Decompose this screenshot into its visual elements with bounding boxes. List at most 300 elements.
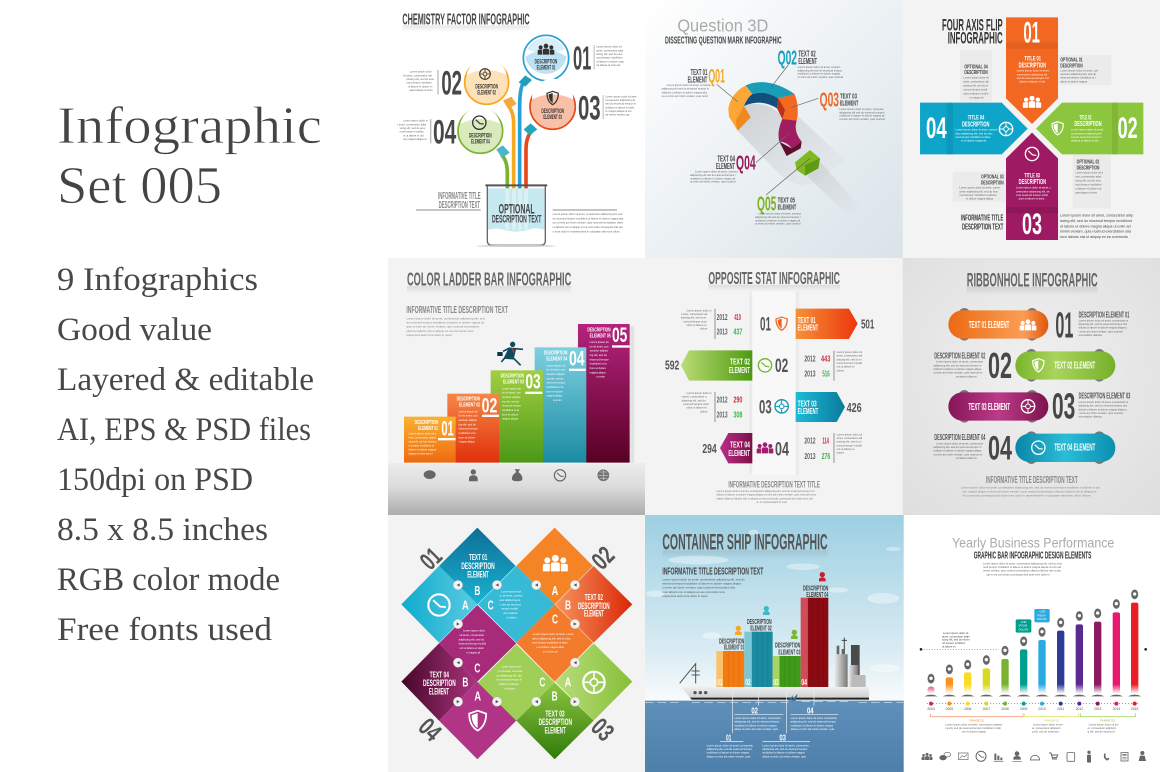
arrow 03: ELEMENT [798, 406, 819, 416]
sea note 02: 02 [751, 705, 758, 715]
note with dotted line: scing elit, sed do eiusm [942, 638, 970, 642]
optional labels: mod tempor incididunt [1075, 182, 1102, 186]
panel: opposite stat [645, 258, 903, 515]
label Q02: incididunt ut labore et dolore magna [798, 72, 840, 76]
bar 05: DESCRIPTION [587, 327, 611, 333]
bar 04: eiusmod tempor [546, 381, 565, 385]
callout teal [1016, 619, 1031, 633]
timeline: 2010 [1038, 707, 1046, 711]
stats upper right: Lorem ipsum dolor sit [837, 350, 862, 354]
side descriptions: re magna aliqua ut eni [605, 109, 632, 113]
green diamonds: TEXT 03 [545, 709, 565, 719]
footer title: itation ullamco laboris nisi ut aliquip ex ea commodo consequat duis aute irure dol [717, 496, 813, 500]
orange diamonds: mod tempor incididunt ut labor [532, 641, 568, 645]
panel: chemistry factor [388, 0, 645, 258]
label Q02: ut enim ad minim veniam, quis nostrud [798, 75, 844, 79]
lower description: Lorem ipsum dolor sit amet, consectetur adip [1060, 214, 1133, 218]
bar 05: 05 [612, 323, 627, 347]
description 01 [1079, 309, 1130, 337]
orange diamonds: TEXT 02 [585, 592, 603, 602]
bar 02: magna aliqua [459, 440, 475, 444]
letters A B C: C [552, 611, 558, 626]
side descriptions: mod tempor incididunt [596, 56, 623, 60]
side descriptions: t amet, consectetur adipi [397, 122, 427, 126]
callout teal: DOLOR [1019, 627, 1028, 631]
beaker [476, 184, 556, 247]
optional labels: ctetur adipiscing elit, sed do eius [959, 189, 998, 193]
bar 02 [447, 393, 499, 463]
side descriptions: Lorem ipsum dolor sit [596, 45, 622, 49]
label Q04 [690, 153, 756, 184]
ribbon 03 [948, 390, 1048, 423]
ribbon 03: TEXT 03 ELEMENT [968, 402, 1010, 413]
container bar 03 [773, 643, 801, 687]
stats lower right: 2013 [804, 452, 816, 461]
bar 05: eiusmod tempor [590, 357, 609, 361]
intro text [406, 305, 508, 337]
optional labels: abore et dolore magna [1060, 79, 1088, 83]
flask 04: DESCRIPTION [469, 133, 492, 139]
intro text: INFORMATIVE TITLE DESCRIPTION TEXT [406, 305, 508, 316]
bar 04: incididunt ut la [546, 385, 564, 389]
feature list: AI, EPS & PSD files [57, 412, 311, 448]
arrow 04: ELEMENT [728, 449, 750, 458]
container bar 01: DESCRIPTION [719, 638, 744, 645]
flask 02: DESCRIPTION [475, 85, 498, 91]
feature list: Layered & editable [57, 362, 314, 398]
container bar 04: 04 [801, 677, 807, 687]
phase 03 [1088, 719, 1119, 733]
lower description: minim veniam, quis nostrud exercitation ulla [1060, 230, 1132, 234]
icon: man [1087, 751, 1091, 763]
informative title: DESCRIPTION TEXT [962, 222, 1003, 231]
phase 01: ng elit, sed do eiusmod tempor incididunt ut lab [945, 726, 1001, 730]
bar 04: ing elit, sed do [546, 376, 564, 380]
phase 03: et, consectetur adipiscin [1088, 726, 1117, 730]
bar 04: sectetur adipisc [546, 372, 565, 376]
stats lower left: 290 [733, 395, 743, 404]
heading: four axis flip [942, 16, 1003, 47]
arrow 02: TEXT 02 [730, 357, 750, 367]
arm 01 orange: TITLE 01 [1024, 56, 1041, 63]
panel: question 3D: Q01 [708, 67, 725, 88]
arrow 01: 501 [861, 317, 875, 332]
bar 04: 04 [569, 346, 585, 370]
label Q04: adipiscing elit sed do eiusmod tempor i [690, 173, 736, 177]
bar 03 [491, 370, 543, 463]
flask 03 [524, 79, 575, 135]
stats upper right: 443 [821, 354, 831, 363]
flask 03: DESCRIPTION [541, 109, 564, 115]
numbers 01-04: 04 [433, 113, 457, 151]
label Q05: ELEMENT [778, 202, 797, 211]
stats upper right: usmod tempor incidid [837, 361, 862, 365]
phase 02 [1032, 719, 1064, 733]
heading: yearly business performance: uip ex ea commodo consequat duis aute irure dolor in [986, 572, 1050, 576]
stats lower left: dipiscing elit, sed do [682, 398, 706, 402]
label Q03: Q03 [820, 89, 839, 111]
icon: globe [598, 470, 609, 481]
letters A B C: B [552, 689, 558, 704]
lower description: co laboris nisi ut aliquip ex ea commodo consequat duis aut [553, 225, 623, 229]
ribbon 02 [1015, 349, 1115, 382]
bar 02: lor sit amet, con [459, 414, 478, 418]
description 04 [933, 432, 986, 460]
sea [645, 701, 904, 772]
panel: four axis flip [903, 0, 1160, 258]
blue diamonds [401, 528, 555, 643]
description 03: dipiscing elit, sed do eiusmod tempor inci [1079, 404, 1128, 408]
container bar 03: DESCRIPTION [775, 643, 800, 650]
stats lower right [804, 432, 862, 463]
bar 01: labore et dolore magna [409, 448, 437, 452]
callout teal: LOR [1021, 620, 1027, 624]
timeline: 2013 [1094, 707, 1102, 711]
description 03: t enim ad minim veniam, quis nostrud [1079, 411, 1123, 415]
phase 03: g elit, sed do eiusmod t [1088, 729, 1115, 733]
label Q01: Lorem ipsum dolor sit amet, consecte [667, 83, 711, 87]
blue diamonds: Lorem ipsum dol [501, 589, 521, 593]
phase 03: PHASE 03 [1100, 719, 1115, 723]
ribbon 01 [948, 308, 1048, 341]
label Q04: Q04 [736, 153, 756, 175]
note with dotted line: ut labore et [942, 644, 956, 648]
icon: clipboard [1067, 753, 1075, 761]
rotated numbers: 02 [586, 541, 620, 575]
footer title: INFORMATIVE DESCRIPTION TEXT TITLE [728, 479, 820, 489]
optional labels: scing elit, sed do eius [1075, 178, 1101, 182]
optional labels: piscing elit, sed do ei [963, 84, 988, 88]
optional labels: amet, consectetur adi [963, 80, 989, 84]
blue diamonds: et dolore [506, 615, 517, 619]
arrow 03 [796, 392, 862, 422]
stats top left: 2012 [717, 313, 728, 322]
side descriptions: Lorem ipsum dolor [410, 70, 432, 74]
optional labels: ut labore et dolore ma [1075, 186, 1102, 190]
stats top left [681, 308, 743, 339]
sea note 04: incididunt ut labore et dolore magna [791, 723, 833, 727]
label Q03 [820, 89, 885, 121]
heading: chemistry factor [402, 12, 530, 32]
white ledge [404, 462, 631, 465]
sea note 04: 04 [807, 705, 814, 715]
value pins [927, 589, 1138, 684]
arm 04 blue: mod tempor incididunt ut labo [955, 135, 991, 139]
optional labels [959, 58, 1103, 201]
flask 01: ELEMENT 01 [537, 66, 556, 72]
icon: clock [554, 470, 566, 481]
numbers 01-04: 02 [988, 345, 1012, 386]
heading: question 3D: DISSECTING QUESTION MARK INFOGRAPHIC [665, 35, 782, 46]
intro text: equat duis aute irure dolor in repre [406, 333, 452, 337]
optional labels: et dolore magna aliqua [966, 197, 994, 201]
description 02: cididunt ut labore et dolore magna aliqua [933, 367, 982, 371]
heading: yearly business performance: Yearly Business Performance [952, 535, 1115, 551]
letters A B C [462, 583, 572, 704]
label Q01: TEXT 01 [691, 68, 708, 77]
label Q05: Q05 [757, 193, 776, 215]
bar 01: 01 [441, 417, 454, 441]
informative title [961, 214, 1004, 231]
sea note 03: Lorem ipsum dolor sit amet, consectetu [762, 743, 809, 747]
intro text: ullamco laboris nisi ut aliquip ex ea commodo cons [406, 329, 474, 333]
icon: phone [1105, 754, 1109, 760]
informative title [416, 191, 481, 211]
arm 03 purple: DESCRIPTION [1019, 177, 1046, 186]
arm 02 green: 02 [1118, 112, 1138, 145]
purple diamonds: DESCRIPTION [423, 678, 456, 688]
center strip [749, 291, 799, 475]
ship hull [679, 664, 869, 701]
connector lines [720, 690, 838, 742]
sea note 01 [707, 733, 754, 758]
icon: person [1012, 751, 1022, 762]
arm 01 orange: sed do eiusmod tempor inci [1017, 76, 1050, 80]
footer title: or in reprehenderit in volu [757, 500, 787, 504]
side bars [430, 45, 604, 143]
stats lower left: eiusmod tempor incid [683, 402, 709, 406]
footer title: ore magna aliqua ut enim ad minim veniam, quis nostrud exercitation ullamco laboris nisi ut aliquip ex [963, 490, 1097, 494]
arm 02 green: Lorem ipsum dolor sit amet, [1071, 128, 1104, 132]
label Q05: adipiscing elit sed do eiusmod tempor i [755, 215, 801, 219]
arm 04 blue: Lorem ipsum dolor sit amet, consec [955, 128, 998, 132]
numbers 01-04 [433, 40, 601, 151]
side descriptions: ut labore et dolore m [408, 84, 433, 88]
bar 03: magna aliqua [502, 417, 518, 421]
arm 02 green: TITLE 02 [1079, 114, 1092, 121]
bar 02: bore et dolore [459, 435, 476, 439]
blue diamonds: ELEMENT [467, 569, 489, 579]
stats lower left: t amet, consectetur a [682, 395, 707, 399]
bar 02: sectetur adipisc [459, 418, 478, 422]
stats lower left: idunt ut labore et [687, 406, 707, 410]
description 03: didunt ut labore et dolore magna aliqua u [1079, 407, 1127, 411]
letters A B C: C [539, 675, 546, 690]
lower description: do eiusmod tempor incididunt ut labore et dolore magna aliq [553, 216, 624, 220]
numbers 01-04: 03 [578, 89, 601, 127]
bar 03: ing elit, sed do [502, 399, 520, 403]
title: Infographic Set 005: Set 005 [57, 157, 222, 215]
side descriptions: scing elit, sed do eius [400, 126, 426, 130]
timeline: 2008 [1001, 707, 1009, 711]
arm 04 blue: 04 [926, 112, 947, 145]
label Q03: adipiscing elit sed do eiusmod tempor i [839, 110, 885, 114]
intro text: Lorem ipsum dolor sit amet, consectetur adipiscing elit, sed do [662, 577, 745, 581]
ribbon 02: TEXT 02 ELEMENT [1054, 361, 1095, 372]
sea note 03 [762, 733, 809, 758]
note with dotted line [920, 631, 1147, 651]
label Q03: TEXT 03 [840, 91, 857, 100]
note with dotted line: Lorem ipsum dolor sit [943, 631, 969, 635]
timeline: 2012 [1076, 707, 1083, 711]
feature list: Free fonts used [57, 612, 273, 648]
icon: chart screen [958, 753, 968, 760]
side descriptions: mod tempor incididun [406, 81, 432, 85]
footer title: didunt ut labore et dolore magna aliqua ut enim ad minim veniam, quis nostrud exerc [717, 493, 817, 497]
timeline [927, 702, 1139, 711]
green diamonds: DESCRIPTION [539, 717, 572, 727]
sea note 04: Lorem ipsum dolor sit amet, consectetu [791, 716, 838, 720]
sea note 01: incididunt ut labore et dolore magna [707, 751, 749, 755]
letters A B C: C [488, 597, 494, 612]
bar 01: ELEMENT 01 [418, 426, 438, 432]
icon: cart [1049, 753, 1058, 759]
shelf icons [424, 469, 609, 481]
label Q02: TEXT 02 [798, 50, 816, 59]
letters A B C: A [552, 583, 559, 598]
icon: running businessman [497, 342, 523, 365]
green diamonds: ELEMENT [545, 725, 566, 735]
green diamonds: Lorem ipsum dol [501, 665, 521, 669]
description 01: dipiscing elit, sed do eiusmod tempor inci [1079, 322, 1128, 326]
arrow 04: 294 [702, 441, 717, 456]
bar 04: ut enim [553, 398, 562, 402]
timeline: 2015 [1131, 707, 1139, 711]
description 01: Lorem ipsum dolor sit amet, consectetur a [1079, 318, 1129, 322]
bar 04: Lorem ipsum do [546, 363, 566, 367]
phase brackets [930, 713, 1135, 717]
letters A B C: A [462, 597, 469, 612]
optional labels: Lorem ipsum dolor sit [963, 76, 989, 80]
timeline: 2011 [1057, 707, 1064, 711]
side descriptions: cididunt ut labore et dolo [605, 105, 635, 109]
description 02 [933, 351, 986, 378]
heading: container ship [662, 530, 828, 558]
numbers 01-04 [988, 304, 1075, 468]
label Q01: ua ut enim ad minim veniam, quis nostr [662, 94, 708, 98]
stats lower left: dolore [700, 409, 708, 413]
flask 01 [519, 35, 569, 87]
arrow 01 [796, 309, 875, 339]
rotated numbers [413, 541, 620, 747]
label Q05: Lorem ipsum dolor sit amet, consect [758, 212, 801, 216]
lower description: ut labore et dolore magna aliqua ut enim ad [1060, 224, 1131, 228]
icon row [922, 751, 1146, 763]
optional labels: DESCRIPTION [1077, 165, 1099, 171]
label Q02: adipiscing elit sed do eiusmod tempor [798, 68, 842, 72]
label Q01: cididunt ut labore et dolore magna aliq [662, 90, 707, 94]
orange diamonds [516, 528, 632, 682]
dot arrowheads [457, 583, 577, 703]
arm 04 blue: TITLE 04 [968, 114, 985, 121]
stats upper right: unt ut labore et [837, 365, 855, 369]
description 03 [1079, 391, 1131, 419]
flask 02: ELEMENT 02 [477, 91, 496, 97]
arrow 04 [702, 433, 752, 463]
panel: chemistry factor: INFORMATIVE TITLE [438, 191, 481, 202]
timeline: 2004 [927, 707, 935, 711]
container bar 04 [801, 586, 828, 687]
footer title: Lorem ipsum dolor sit amet, consectetur adipiscing elit, sed do eiusmod tempor incididunt ut labore et dol [961, 486, 1100, 490]
center numbers and icons: 03 [759, 397, 772, 418]
feature list [57, 262, 314, 648]
description 04: adipiscing elit, sed do eiusmod tempor in [933, 445, 982, 449]
description 02: adipiscing elit, sed do eiusmod tempor in [933, 363, 982, 367]
intro text: eiusmod tempor incididunt ut labore et dolore magna aliqua [662, 581, 741, 585]
arm 01 orange: DESCRIPTION [1019, 60, 1046, 69]
bar 03: sectetur adipisc [502, 395, 521, 399]
stats lower right: dolore [837, 451, 845, 455]
description 04: cididunt ut labore et dolore magna aliqua [933, 449, 982, 453]
ghost option cards [953, 50, 1111, 208]
description 03: exercitation ullamco [1079, 415, 1103, 419]
panel: chemistry factor: CHEMISTRY FACTOR INFOGRAPHIC [402, 12, 530, 29]
container stripes [728, 598, 824, 687]
sea note 03: incididunt ut labore et dolore magna [762, 751, 805, 755]
description 02: Lorem ipsum dolor sit amet, consectetur [936, 360, 983, 364]
phase 02: et, consectetur adipiscin [1032, 726, 1061, 730]
leader lines [717, 65, 818, 195]
arm 01 orange: Lorem ipsum dolor sit amet, [1017, 69, 1050, 73]
purple diamonds: adipiscing elit, sed do [459, 637, 485, 641]
intro text: INFORMATIVE TITLE DESCRIPTION TEXT [662, 566, 763, 577]
panel: color ladder bar [388, 258, 645, 516]
heading: yearly business performance [952, 535, 1115, 576]
rotated numbers: 03 [585, 713, 619, 747]
arm 03 purple [1006, 133, 1058, 241]
intro text: mco laboris nisi ut aliquip ex ea commodo cons [662, 590, 725, 594]
bar 04 [535, 346, 586, 463]
panel: ribbonhole: 01 [1055, 304, 1073, 345]
arm 04 blue [920, 103, 1028, 154]
side descriptions: nt ut labore et dol [403, 133, 424, 137]
bar 03: incididunt ut la [502, 408, 519, 412]
icon: gauge [1030, 755, 1040, 760]
feature list: 9 Infographics [57, 262, 258, 298]
callout blue: IPSUM [1037, 613, 1045, 617]
orange diamonds: Lorem ipsum dolor sit amet, conse [533, 632, 574, 636]
intro text: equat duis aute irure dolor in repre [662, 594, 708, 598]
sea note 02: adipiscing elit, sed do eiusmod tempor [734, 720, 780, 724]
optional labels: OPTIONAL 02 [1077, 159, 1099, 165]
bar 01: aliqua ut enim ad mi [409, 452, 433, 456]
callout blue: LOR [1040, 610, 1045, 614]
stats upper right: 2012 [804, 354, 816, 363]
orange diamonds: DESCRIPTION [578, 601, 610, 611]
container bar 01: 01 [717, 677, 722, 687]
purple diamonds: TEXT 04 [430, 670, 449, 680]
arm 01 orange: consectetur adipiscing elit, [1017, 72, 1048, 76]
container bar 02 [744, 619, 773, 687]
blue diamonds: TEXT 01 [469, 552, 487, 562]
label Q02: Q02 [778, 48, 797, 70]
optional labels: met, consectetur adipi [1075, 174, 1102, 178]
green diamonds: cididunt ut labore [499, 682, 519, 686]
side descriptions: consectetur adipiscing eli [605, 98, 635, 102]
side descriptions: mod tempor incididu [400, 130, 424, 134]
green diamonds: et dolore [505, 686, 516, 690]
green diamonds: tur adipiscing elit, sed [496, 673, 522, 677]
arm 04 blue: DESCRIPTION [962, 120, 989, 129]
arm 04 blue: tetur adipiscing elit, sed do eius [955, 131, 993, 135]
footer title [717, 479, 820, 504]
optional labels: Lorem ipsum dolor sit amet, con [1060, 68, 1099, 72]
sea note 03: adipiscing elit, sed do eiusmod tempor [762, 747, 808, 751]
stats lower right: 276 [822, 452, 831, 461]
side descriptions: ut labore et dolore mag [596, 59, 624, 63]
numbers 01-04: 04 [988, 430, 1012, 468]
letters A B C: C [474, 661, 481, 676]
arm 02 green: consectetur adipiscing elit [1071, 131, 1102, 135]
callout blue [1034, 609, 1050, 622]
stats top left: dolore [700, 327, 708, 331]
flask 03: ELEMENT 03 [543, 115, 562, 121]
arrow 01: ELEMENT [798, 323, 819, 333]
green diamonds [478, 643, 632, 759]
side descriptions: Lorem ipsum dolor sit ame [605, 94, 637, 98]
person pins [735, 572, 826, 639]
bar 05 [578, 323, 634, 463]
